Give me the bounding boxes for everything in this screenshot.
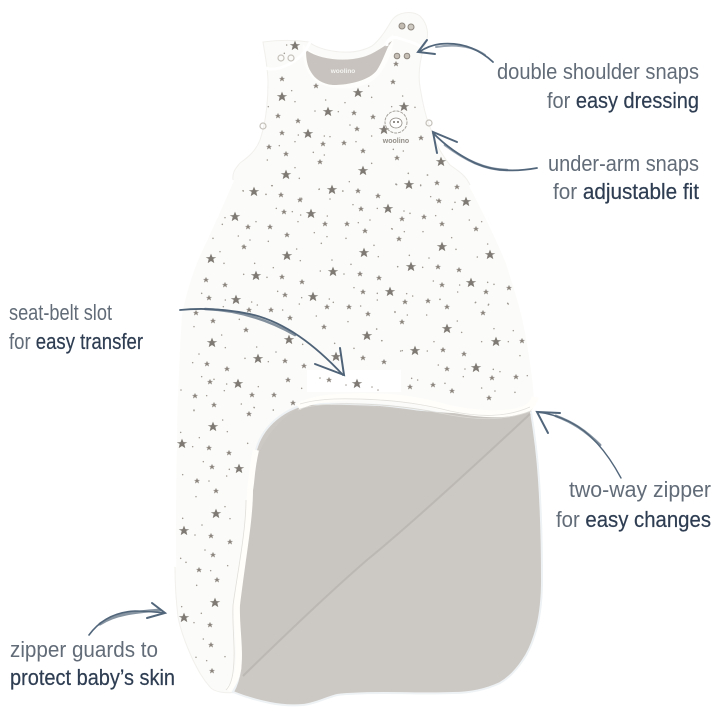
zipper binding bbox=[226, 397, 535, 690]
arrow: zipper guards bbox=[89, 603, 165, 635]
callout: two-way zipper: two-way zipper bbox=[569, 477, 711, 502]
sheep logo: woolino bbox=[382, 138, 409, 145]
shoulder binding left bbox=[266, 42, 310, 69]
callout: seat-belt slot: seat-belt slot bbox=[9, 300, 112, 325]
shoulder binding bbox=[387, 37, 424, 50]
outer edge binding bbox=[175, 180, 535, 567]
seat-belt slot bbox=[307, 370, 401, 392]
callout: under-arm snaps: under-arm snaps bbox=[548, 151, 699, 176]
snaps bbox=[260, 23, 432, 129]
callout: double shoulder snaps: for easy dressing bbox=[547, 88, 699, 113]
sleep sack garment bbox=[175, 13, 542, 705]
star print: small stars bbox=[192, 61, 525, 674]
callout: seat-belt slot: for easy transfer bbox=[9, 329, 143, 354]
callout: zipper guards: protect baby’s skin bbox=[10, 665, 175, 690]
neck label: woolino bbox=[330, 68, 355, 75]
grey inner lining bbox=[233, 404, 542, 705]
callout: under-arm snaps: for adjustable fit bbox=[553, 179, 699, 204]
callout: zipper guards: zipper guards to bbox=[10, 637, 158, 662]
arrow: under-arm snaps bbox=[433, 132, 537, 170]
arrow: two-way zipper bbox=[537, 412, 621, 478]
callout: zipper guards bbox=[10, 637, 175, 690]
neck opening bbox=[303, 34, 394, 88]
callout: seat-belt slot bbox=[9, 300, 143, 354]
star print: dots bbox=[181, 45, 527, 661]
callout: two-way zipper bbox=[556, 477, 711, 532]
callout: two-way zipper: for easy changes bbox=[556, 507, 711, 532]
arrow: seat-belt slot bbox=[180, 309, 344, 375]
star print: large stars bbox=[177, 41, 501, 622]
arrow: shoulder snaps bbox=[418, 40, 493, 62]
callout: double shoulder snaps bbox=[497, 59, 699, 113]
sheep logo bbox=[382, 111, 409, 145]
garment body bbox=[175, 13, 535, 693]
lining fold bbox=[237, 405, 530, 676]
callout: under-arm snaps bbox=[548, 151, 699, 204]
callout: double shoulder snaps: double shoulder snaps bbox=[497, 59, 699, 84]
